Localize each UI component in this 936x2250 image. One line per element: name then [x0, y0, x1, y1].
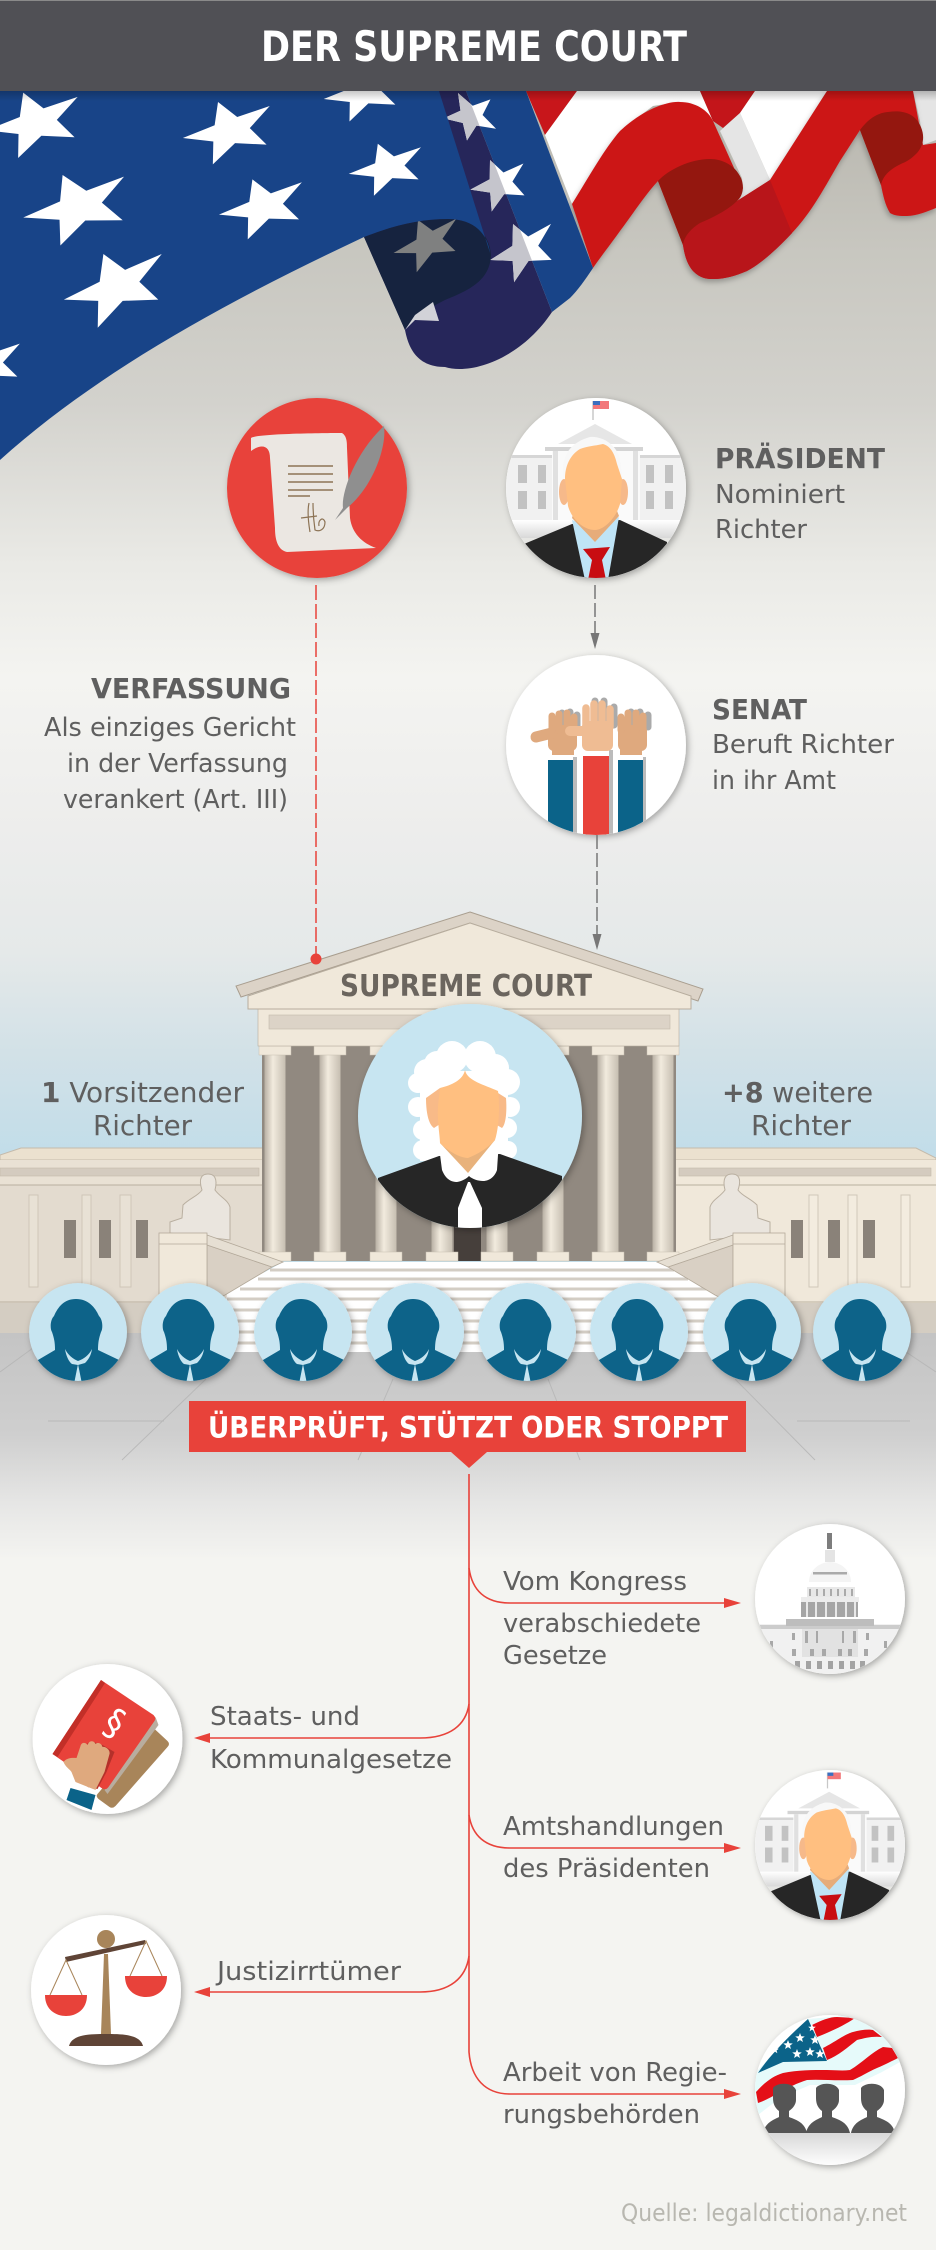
american flag banner [0, 55, 936, 460]
red and white stripes [526, 91, 936, 279]
blue flag strip [466, 91, 593, 312]
icon: president small [753, 1770, 907, 1924]
navy flag fold [364, 91, 552, 369]
icon: capitol [755, 1524, 905, 1679]
arrow: senate to court [592, 835, 602, 950]
judge labels: +8 weitere [722, 1076, 873, 1109]
label: Amtshandlungen: des Präsidenten [503, 1854, 710, 1884]
heading: Senat: Beruft Richter [712, 730, 894, 760]
heading: Präsident: Richter [715, 515, 807, 545]
label: Regierungsbehörden: rungsbehörden [503, 2100, 700, 2130]
judge labels: 1 Vorsitzender [41, 1076, 245, 1109]
label: Amtshandlungen: Amtshandlungen [503, 1812, 724, 1842]
banner: ÜBERPRÜFT, STÜTZT ODER STOPPT [208, 1410, 728, 1444]
label: Justizirrtümer: Justizirrtümer [215, 1957, 401, 1987]
dark fold underside [364, 219, 491, 330]
heading: Verfassung: Als einziges Gericht [44, 713, 296, 743]
label: Regierungsbehörden [503, 2058, 727, 2130]
label: Staats- und Kommunalgesetze [210, 1702, 452, 1775]
heading: Verfassung: VERFASSUNG [91, 672, 291, 705]
heading: Präsident: Nominiert [715, 480, 845, 510]
heading: Senat: in ihr Amt [712, 766, 836, 796]
icon: flag with officials [750, 2015, 905, 2166]
connector: constitution to court [310, 585, 322, 964]
court inscription: SUPREME COURT [340, 969, 593, 1004]
judge labels: Richter [93, 1109, 193, 1142]
arrow: president to senate [590, 585, 600, 649]
banner [189, 1401, 746, 1468]
title bar [0, 0, 936, 101]
icon: president [504, 398, 688, 583]
judge labels [41, 1076, 873, 1142]
icon: scales of justice [31, 1915, 181, 2065]
icon: law book [32, 1664, 182, 1814]
ground and lower background [0, 1333, 936, 2250]
icon: law book: § [96, 1700, 133, 1746]
heading: Präsident [715, 441, 886, 545]
associate justices [29, 1283, 911, 1387]
icon: constitution scroll [227, 398, 407, 578]
title: DER SUPREME COURT [261, 22, 687, 71]
background [0, 0, 936, 1340]
heading: Verfassung: verankert (Art. III) [63, 785, 288, 815]
icon: chief justice [358, 1004, 582, 1231]
heading: Senat [712, 693, 894, 796]
heading: Verfassung [44, 672, 296, 815]
label: Staats- und Kommunalgesetze: Kommunalgesetze [210, 1745, 452, 1775]
plaza floor [0, 1333, 936, 1560]
label: Regierungsbehörden: Arbeit von Regie- [503, 2058, 727, 2088]
label: Kongress: verabschiedete [503, 1609, 701, 1639]
connector tree [194, 1474, 741, 2099]
label: Kongress: Vom Kongress [503, 1567, 687, 1597]
label: Staats- und Kommunalgesetze: Staats- und [210, 1702, 360, 1732]
heading: Verfassung: in der Verfassung [67, 749, 288, 779]
judge labels: Richter [751, 1109, 852, 1142]
main blue field with stars [0, 91, 490, 460]
label: Kongress [503, 1567, 701, 1671]
heading: Senat: SENAT [712, 693, 808, 726]
source: Quelle: legaldictionary.net [621, 2199, 907, 2227]
label: Amtshandlungen [503, 1812, 724, 1884]
court centre with columns [236, 912, 703, 1261]
court stairs and statues [159, 1174, 785, 1352]
label: Kongress: Gesetze [503, 1641, 607, 1671]
icon: senate raised hands [506, 655, 686, 842]
heading: Präsident: PRÄSIDENT [715, 441, 886, 475]
court wings [0, 1148, 936, 1333]
